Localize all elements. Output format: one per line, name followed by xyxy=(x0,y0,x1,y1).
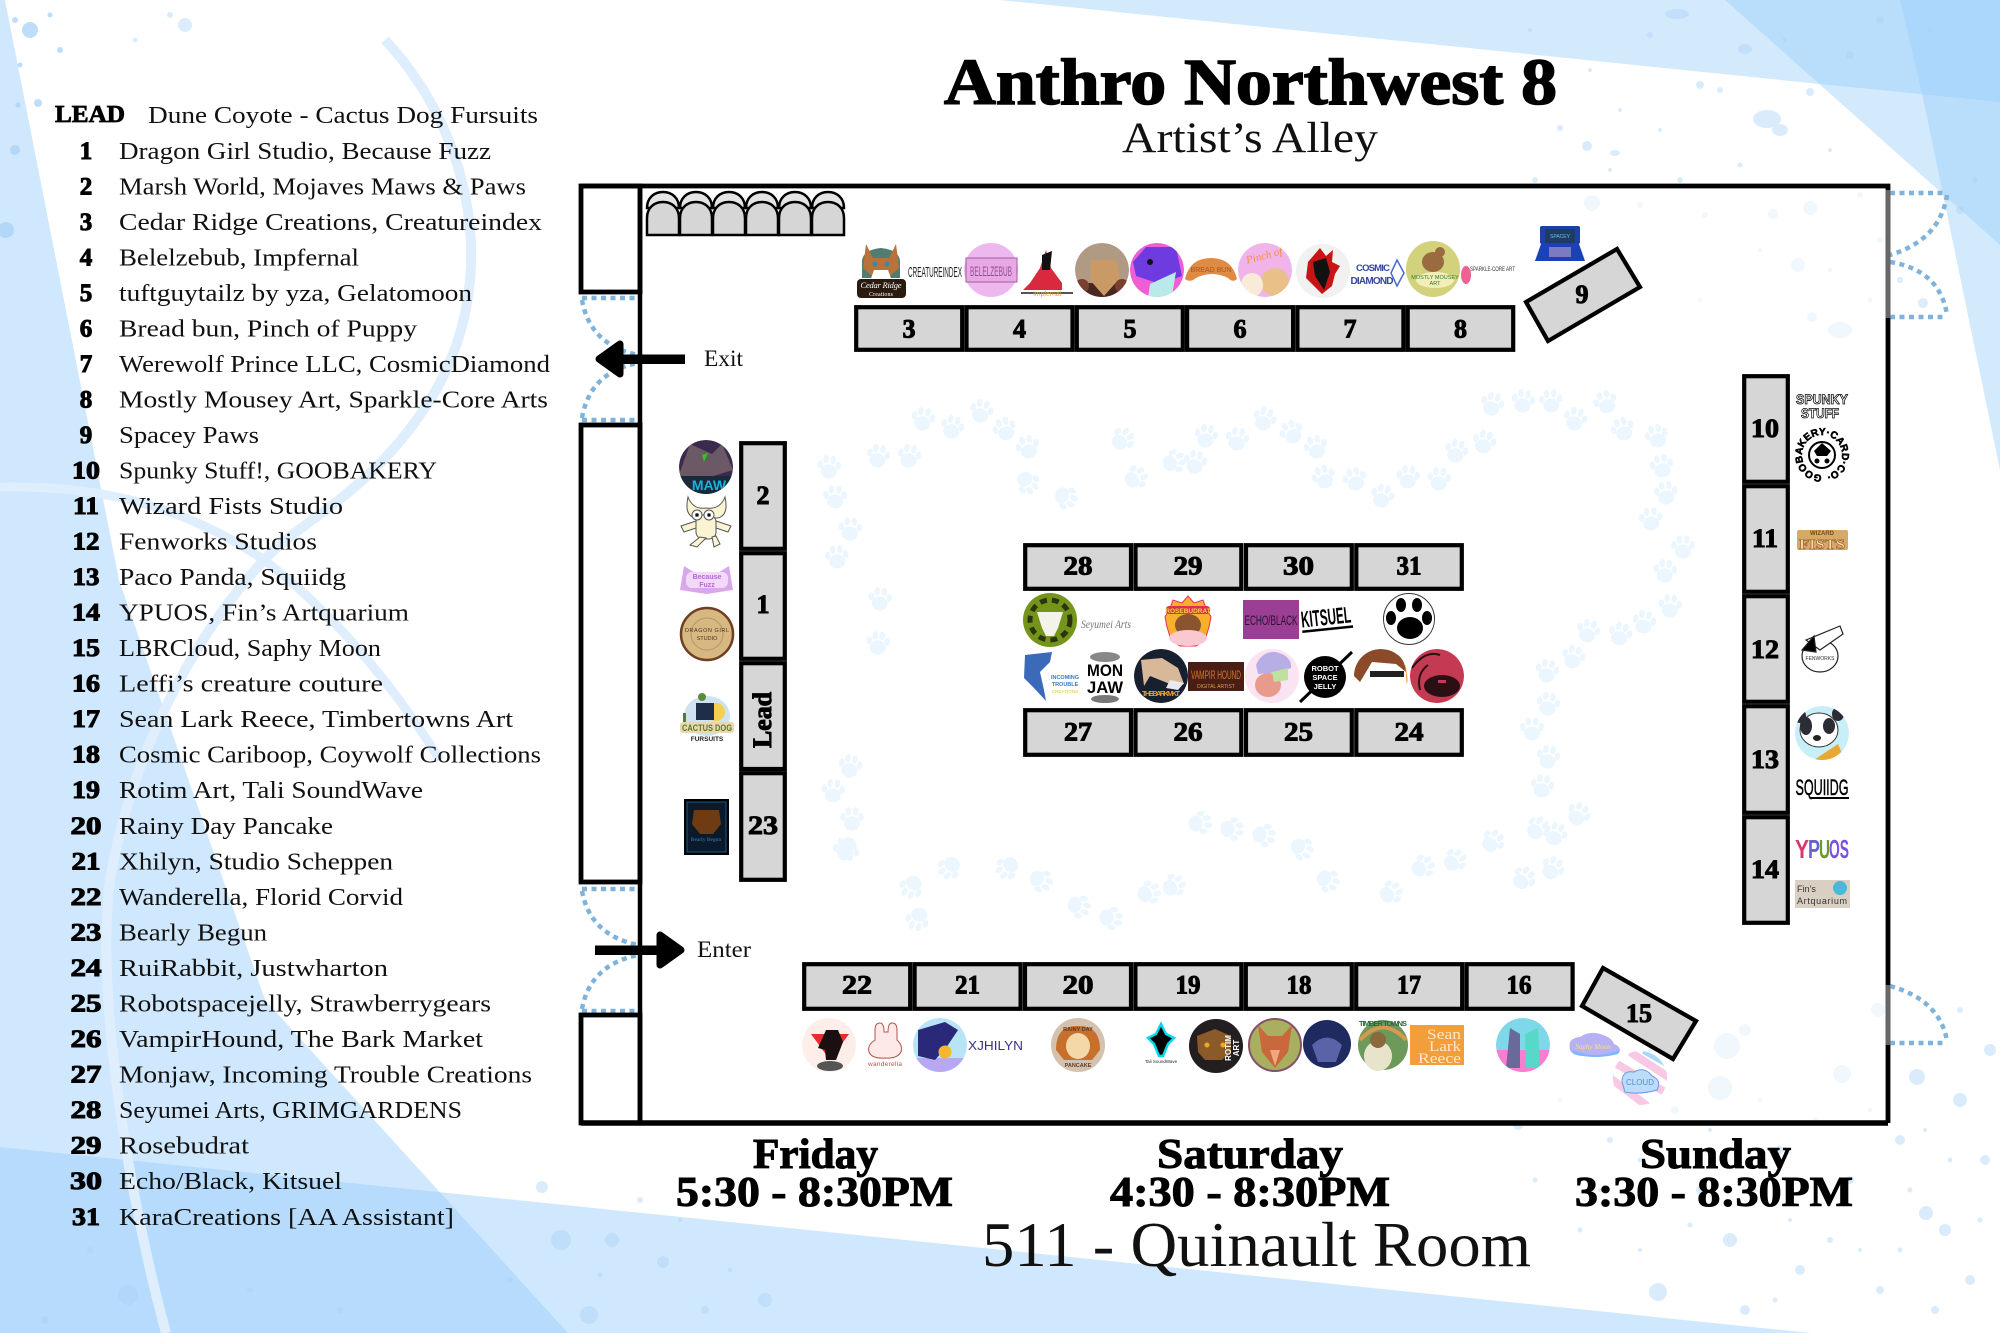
schedule: Friday: Friday xyxy=(753,1132,878,1178)
legend row 10: Spunky Stuff!, GOOBAKERY xyxy=(119,458,437,484)
logo: Squiidg xyxy=(1796,775,1849,800)
room name: 511 - Quinault Room xyxy=(982,1209,1531,1280)
logos: right column xyxy=(1795,391,1850,908)
logo: Because Fuzz: Fuzz xyxy=(699,582,715,589)
logo: Monjaw: MON xyxy=(1087,661,1123,680)
logo: Dragon Girl Studio xyxy=(681,608,733,660)
tables: right column 10 to 14 xyxy=(1744,376,1788,923)
logo: Robotspacejelly: JELLY xyxy=(1314,682,1336,691)
legend row 23: 23 xyxy=(70,919,102,946)
legend row 26: VampirHound, The Bark Market xyxy=(119,1027,483,1053)
legend row 20: Rainy Day Pancake xyxy=(119,814,333,840)
logo: Mojaves Maws xyxy=(679,440,733,496)
logo: Bread bun xyxy=(1185,258,1237,281)
logo: YPUOS: Y xyxy=(1795,834,1809,864)
legend row 5: tuftguytailz by yza, Gelatomoon xyxy=(119,281,472,307)
legend row 24 xyxy=(70,955,388,982)
legend row 20 xyxy=(70,813,333,840)
logo: GRIMGARDENS xyxy=(1023,593,1077,647)
legend row 31: KaraCreations [AA Assistant] xyxy=(119,1205,454,1231)
logo: The Bark Market: THE BARKMKT xyxy=(1142,689,1180,698)
schedule: Sunday: 3:30 - 8:30PM xyxy=(1575,1170,1853,1216)
logo: Saphy Moon xyxy=(1569,1033,1620,1057)
legend row 18: Cosmic Cariboop, Coywolf Collections xyxy=(119,743,541,769)
legend row 11: Wizard Fists Studio xyxy=(119,494,343,520)
logo: Rotim Art: ART xyxy=(1232,1040,1241,1056)
logo: Cosmic Diamond xyxy=(1350,260,1404,287)
logo: VampirHound: DIGITAL ARTIST xyxy=(1197,684,1235,690)
logo: Impfernal: Impfernal xyxy=(1033,291,1061,298)
panel: vendor legend xyxy=(55,102,550,1231)
legend row 1: 1 xyxy=(80,138,92,165)
logo: Wizard Fists: FISTS xyxy=(1799,537,1845,553)
logo: Cactus Dog Fursuits: FURSUITS xyxy=(691,736,724,743)
tables: center row 27 to 24: 27 xyxy=(1064,718,1092,746)
legend row 14: YPUOS, Fin’s Artquarium xyxy=(119,600,409,626)
tables: center row 28 to 31: 29 xyxy=(1174,552,1202,580)
legend row 13: Paco Panda, Squiidg xyxy=(119,565,346,591)
logo: Incoming Trouble xyxy=(1024,652,1079,701)
logos: center table row xyxy=(1023,593,1464,703)
logo: Echo/Black xyxy=(1243,600,1299,639)
legend row 6: 6 xyxy=(80,315,92,342)
legend row 23: Bearly Begun xyxy=(119,920,267,946)
logo: Strawberrygears xyxy=(1245,649,1299,703)
tables: left column 2, 1, Lead, 23: 1 xyxy=(756,590,770,619)
tables: bottom row 22 to 16: 18 xyxy=(1286,970,1312,1000)
legend row 12 xyxy=(72,528,317,555)
legend row 12: 12 xyxy=(72,528,100,555)
logo: Bread bun: BREAD BUN xyxy=(1191,267,1231,274)
legend row 26: 26 xyxy=(70,1026,102,1053)
logo: Spacey Paws xyxy=(1535,226,1585,261)
legend row 23 xyxy=(70,919,267,946)
logo: Kitsuel: KITSUEL xyxy=(1300,601,1352,633)
schedule: Saturday: 4:30 - 8:30PM xyxy=(1110,1170,1390,1216)
logo: YPUOS xyxy=(1795,834,1849,864)
label: enter: Enter xyxy=(697,937,751,962)
tables: top row 3 to 8: 3 xyxy=(902,314,916,344)
chairs xyxy=(647,192,844,235)
tables: right column 10 to 14: 10 xyxy=(1751,414,1779,443)
logo: Wanderella: wanderella xyxy=(867,1061,902,1068)
legend row 15: LBRCloud, Saphy Moon xyxy=(119,636,381,662)
logos: top row xyxy=(857,226,1585,298)
logo: The Bark Market xyxy=(1134,649,1188,703)
logo: Rainy Day Pancake: RAINY DAY xyxy=(1063,1027,1093,1033)
logo: Echo/Black: ECHO/BLACK xyxy=(1244,612,1298,628)
legend row 11 xyxy=(73,493,343,520)
legend row 30: 30 xyxy=(70,1168,102,1195)
logo: Rosebudrat xyxy=(1165,596,1211,646)
tables: left column 2, 1, Lead, 23 xyxy=(741,443,785,880)
logo: Bearly Begun: Bearly Begun xyxy=(691,837,721,843)
logo: Mostly Mousey Art: ART xyxy=(1430,281,1441,287)
tables: bottom row 22 to 16: 22 xyxy=(842,970,872,1000)
legend row 19: Rotim Art, Tali SoundWave xyxy=(119,778,423,804)
logo: Wizard Fists xyxy=(1797,530,1848,553)
tables: right column 10 to 14: 11 xyxy=(1752,524,1778,553)
logo: Incoming Trouble: INCOMING xyxy=(1051,675,1079,681)
logos: top row: CREATUREINDEX xyxy=(908,264,962,281)
logo: Impfernal xyxy=(1021,250,1073,298)
schedule: Sunday: Sunday xyxy=(1640,1132,1791,1178)
logo: Pinch of Puppy: Pinch of xyxy=(1244,245,1286,267)
logo: Saphy Moon: Saphy Moon xyxy=(1575,1043,1611,1051)
logo: Fin's Artquarium: Fin’s xyxy=(1797,884,1816,894)
tables: left column 2, 1, Lead, 23: 23 xyxy=(748,811,778,840)
legend row 9: Spacey Paws xyxy=(119,423,259,449)
legend row 13: 13 xyxy=(72,564,100,591)
legend row 15: 15 xyxy=(72,635,100,662)
logo: Rosebudrat: ROSEBUDRAT xyxy=(1165,608,1211,615)
logo: Spacey Paws: SPACEY xyxy=(1550,234,1571,240)
schedule: Saturday: Saturday xyxy=(1157,1132,1343,1178)
legend row 30 xyxy=(70,1168,342,1195)
logo: Cedar Ridge: Creations xyxy=(869,292,894,298)
legend row 25: 25 xyxy=(70,990,102,1018)
legend row 11: 11 xyxy=(73,493,99,520)
logo: Xhilyn wordmark: XJHILYN xyxy=(968,1038,1023,1053)
logo: Sparkle-Core xyxy=(1461,266,1515,284)
logo: Gelatomoon xyxy=(1130,243,1184,298)
legend row 10: 10 xyxy=(72,457,100,484)
legend row 24: 24 xyxy=(70,955,102,982)
tables: top row 3 to 8: 6 xyxy=(1234,314,1246,344)
logo: Spunky Stuff: SPUNKY xyxy=(1796,391,1849,407)
panel: floor plan xyxy=(578,184,1950,1126)
logo: Monjaw xyxy=(1087,652,1124,703)
logo: Xhilyn circle xyxy=(913,1018,967,1072)
logo: Leffi's creature couture xyxy=(1496,1018,1550,1072)
tables: top row 3 to 8: 7 xyxy=(1344,314,1356,344)
legend row 14: 14 xyxy=(72,600,101,626)
schedule: Friday: 5:30 - 8:30PM xyxy=(676,1170,953,1216)
tables: left column 2, 1, Lead, 23: 2 xyxy=(756,481,770,510)
legend row 16: 16 xyxy=(72,671,100,698)
legend row 28: Seyumei Arts, GRIMGARDENS xyxy=(119,1098,462,1124)
tables: bottom row 22 to 16: 19 xyxy=(1176,970,1200,1000)
legend row 31: 31 xyxy=(72,1204,100,1231)
legend row 18: 18 xyxy=(72,742,100,769)
legend row 5: 5 xyxy=(80,280,92,307)
legend row 29: Rosebudrat xyxy=(119,1134,249,1160)
background: top-left splatter xyxy=(0,12,192,238)
tables: top row 3 to 8: 5 xyxy=(1124,314,1136,344)
logo: Dragon Girl Studio: DRAGON GIRL xyxy=(685,628,729,634)
logo: KaraCreations xyxy=(1384,594,1434,644)
logo: Fin's Artquarium: Artquarium xyxy=(1797,896,1847,906)
logo: Robotspacejelly: ROBOT xyxy=(1311,664,1339,673)
logo: Cactus Dog Fursuits: CACTUS DOG xyxy=(682,723,732,733)
logo: Wizard Fists: WIZARD xyxy=(1810,531,1835,537)
logo: Wanderella xyxy=(867,1023,902,1068)
tables: top row 3 to 8: 4 xyxy=(1013,314,1026,344)
schedule: Sunday xyxy=(1575,1132,1853,1216)
legend row: lead xyxy=(55,102,538,129)
title: Anthro Northwest 8 xyxy=(944,46,1557,119)
logo: LBRCloud: CLOUD xyxy=(1626,1078,1654,1087)
paw print trail xyxy=(816,387,1695,934)
logo: Belelzebub xyxy=(964,243,1018,297)
legend row 4: Belelzebub, Impfernal xyxy=(119,245,359,271)
label: exit: Exit xyxy=(704,346,744,371)
table 9: 9 xyxy=(1576,280,1588,309)
legend row 6: Bread bun, Pinch of Puppy xyxy=(119,316,417,342)
tables: bottom row 22 to 16: 17 xyxy=(1397,970,1421,1000)
logo: Belelzebub: BELELZEBUB xyxy=(970,263,1012,279)
logo: Cedar Ridge: Cedar Ridge xyxy=(860,280,902,290)
logo: Fin's Artquarium xyxy=(1795,880,1850,908)
legend row 3: 3 xyxy=(80,209,92,236)
logo: Sean Lark Reece: Reece xyxy=(1418,1051,1461,1067)
logo: Mostly Mousey Art: MOSTLY MOUSEY xyxy=(1411,275,1459,281)
logo: Robotspacejelly xyxy=(1300,652,1352,702)
logo: Cedar Ridge xyxy=(857,244,906,298)
tables: left column 2, 1, Lead, 23: Lead xyxy=(748,691,777,748)
room interior xyxy=(640,186,1888,1124)
logo: Timbertowns xyxy=(1358,1019,1408,1071)
logos: bottom row xyxy=(802,1018,1672,1108)
logo: Cosmic Diamond: COSMIC xyxy=(1356,263,1390,274)
schedule: Saturday xyxy=(1110,1132,1390,1216)
logo: Rainy Day Pancake: PANCAKE xyxy=(1065,1063,1092,1069)
logo: YPUOS: OS xyxy=(1829,834,1849,864)
logo: LBRCloud xyxy=(1613,1051,1667,1105)
legend row 21: Xhilyn, Studio Scheppen xyxy=(119,849,393,875)
legend row 8: 8 xyxy=(80,386,92,413)
legend row 29: 29 xyxy=(70,1133,102,1160)
doors xyxy=(582,193,1947,1043)
walls xyxy=(581,186,1888,1124)
logo: Because Fuzz: Because xyxy=(693,574,722,581)
legend row 4: 4 xyxy=(80,244,93,271)
logo: Pinch of Puppy xyxy=(1238,243,1292,297)
legend row 17: 17 xyxy=(72,706,100,733)
table 15 xyxy=(1582,968,1696,1059)
logo: Dragon Girl Studio: STUDIO xyxy=(697,636,718,642)
logo: Goobakery: GOOBAKERY·CARD·CO· xyxy=(1795,428,1850,482)
tables: center row 28 to 31: 30 xyxy=(1283,552,1314,580)
logo: Werewolf Prince xyxy=(1296,244,1350,298)
logo: YPUOS: U xyxy=(1819,834,1830,864)
logo: Sean Lark Reece: Sean xyxy=(1427,1027,1462,1043)
tables: center row 27 to 24: 24 xyxy=(1394,718,1424,746)
tables: center row 28 to 31 xyxy=(1025,545,1462,589)
table 9 xyxy=(1526,249,1640,341)
tables: center row 27 to 24: 25 xyxy=(1284,718,1313,746)
legend row 3: Cedar Ridge Creations, Creatureindex xyxy=(119,210,542,236)
logo: Robotspacejelly: SPACE xyxy=(1312,673,1338,682)
logo: VampirHound xyxy=(1188,662,1244,691)
logo: Sean Lark Reece xyxy=(1410,1025,1464,1067)
logo: Mojaves Maws: MAW xyxy=(692,477,727,493)
logo: Cosmic Cariboop xyxy=(1249,1019,1301,1071)
tables: center row 28 to 31: 31 xyxy=(1396,552,1422,580)
tables: center row 27 to 24: 26 xyxy=(1174,718,1202,746)
tables: right column 10 to 14: 14 xyxy=(1751,855,1779,884)
logo: Cosmic Diamond: DIAMOND xyxy=(1350,276,1394,287)
logo: RuiRabbit xyxy=(1410,649,1464,703)
legend row 27: 27 xyxy=(70,1062,102,1089)
legend row 9 xyxy=(80,422,259,449)
logo: YPUOS: P xyxy=(1808,834,1820,864)
logo: Fenworks: FENWORKS xyxy=(1806,656,1835,662)
logo: Incoming Trouble: CREATIONS xyxy=(1052,689,1078,694)
legend row 22: 22 xyxy=(70,884,102,911)
legend row: lead: LEAD xyxy=(55,102,125,128)
legend row 20: 20 xyxy=(70,813,102,840)
legend row 7: 7 xyxy=(80,351,92,378)
table 15: 15 xyxy=(1626,999,1652,1028)
arrow: exit xyxy=(599,344,685,374)
logo: Spunky Stuff xyxy=(1796,391,1849,421)
tables: bottom row 22 to 16: 20 xyxy=(1062,970,1094,1000)
logo: Coywolf Collections xyxy=(1303,1020,1351,1068)
logo: Paco Panda xyxy=(1794,706,1849,760)
tables: top row 3 to 8 xyxy=(856,307,1513,350)
tables: bottom row 22 to 16: 21 xyxy=(955,970,980,1000)
legend row: lead: Dune Coyote - Cactus Dog Fursuits xyxy=(148,103,538,129)
legend row 22: Wanderella, Florid Corvid xyxy=(119,885,403,911)
logo: Squiidg: SQUIIDG xyxy=(1796,775,1848,800)
tables: bottom row 22 to 16: 16 xyxy=(1506,970,1532,1000)
logo: Marsh World xyxy=(681,497,731,547)
legend row 8: Mostly Mousey Art, Sparkle-Core Arts xyxy=(119,387,548,413)
logo: Monjaw: JAW xyxy=(1087,678,1124,697)
legend row 28: 28 xyxy=(70,1097,102,1124)
logo: Florid Corvid xyxy=(802,1018,856,1072)
legend row 12: Fenworks Studios xyxy=(119,529,317,555)
logo: Spunky Stuff: STUFF xyxy=(1801,405,1839,421)
legend row 19: 19 xyxy=(72,777,100,804)
legend row 16: Leffi’s creature couture xyxy=(119,672,383,698)
logo: Tali SoundWave xyxy=(1145,1024,1178,1064)
tables: center row 27 to 24 xyxy=(1025,710,1462,755)
legend row 2: 2 xyxy=(80,173,92,200)
legend row 21: 21 xyxy=(72,848,100,875)
legend row 17: Sean Lark Reece, Timbertowns Art xyxy=(119,707,513,733)
legend row 29 xyxy=(70,1133,249,1160)
logo: Incoming Trouble: TROUBLE xyxy=(1052,682,1079,688)
logo: Fenworks xyxy=(1802,626,1843,672)
legend row 30: Echo/Black, Kitsuel xyxy=(119,1169,342,1195)
logo: Because Fuzz xyxy=(680,566,733,594)
logo: Rotim Art: ROTIM xyxy=(1224,1035,1233,1061)
legend row 27: Monjaw, Incoming Trouble Creations xyxy=(119,1063,532,1089)
arrow: enter xyxy=(595,935,681,965)
tables: right column 10 to 14: 13 xyxy=(1751,745,1779,774)
tables: right column 10 to 14: 12 xyxy=(1751,635,1779,664)
legend row 1: Dragon Girl Studio, Because Fuzz xyxy=(119,139,491,165)
legend row 9: 9 xyxy=(80,422,92,449)
legend row 13 xyxy=(72,564,346,591)
logo: Rotim Art xyxy=(1189,1019,1243,1073)
tables: bottom row 22 to 16 xyxy=(804,964,1573,1009)
tables: center row 28 to 31: 28 xyxy=(1064,552,1092,580)
logo: Mostly Mousey Art xyxy=(1406,241,1460,297)
legend row 2: Marsh World, Mojaves Maws & Paws xyxy=(119,174,526,200)
logo: VampirHound: VAMPIR HOUND xyxy=(1191,668,1241,682)
subtitle: Artist’s Alley xyxy=(1122,115,1379,162)
logos: left column xyxy=(679,440,734,855)
legend row 7: Werewolf Prince LLC, CosmicDiamond xyxy=(119,352,550,378)
schedule: Friday xyxy=(676,1132,953,1216)
logo: Timbertowns: TIMBER TOWNS xyxy=(1359,1019,1407,1028)
logo: Bearly Begun xyxy=(684,799,729,855)
logo: Sean Lark Reece: Lark xyxy=(1429,1039,1462,1055)
legend row 24: RuiRabbit, Justwharton xyxy=(119,956,388,982)
logo: Rainy Day Pancake xyxy=(1051,1018,1105,1072)
legend row 16 xyxy=(72,671,383,698)
logo: Cactus Dog Fursuits xyxy=(680,693,734,743)
logo: Seyumei: Seyumei Arts xyxy=(1081,617,1131,631)
logo: Sparkle-Core: SPARKLE-CORE ART xyxy=(1470,266,1515,273)
tables: top row 3 to 8: 8 xyxy=(1454,314,1467,344)
logo: Kitsuel xyxy=(1300,601,1353,633)
logo: Justwharton xyxy=(1354,649,1408,685)
legend row 25: Robotspacejelly, Strawberrygears xyxy=(119,992,491,1018)
logo: Tali SoundWave: Tali SoundWave xyxy=(1145,1059,1178,1064)
logo: tuftguytailz xyxy=(1075,243,1129,298)
